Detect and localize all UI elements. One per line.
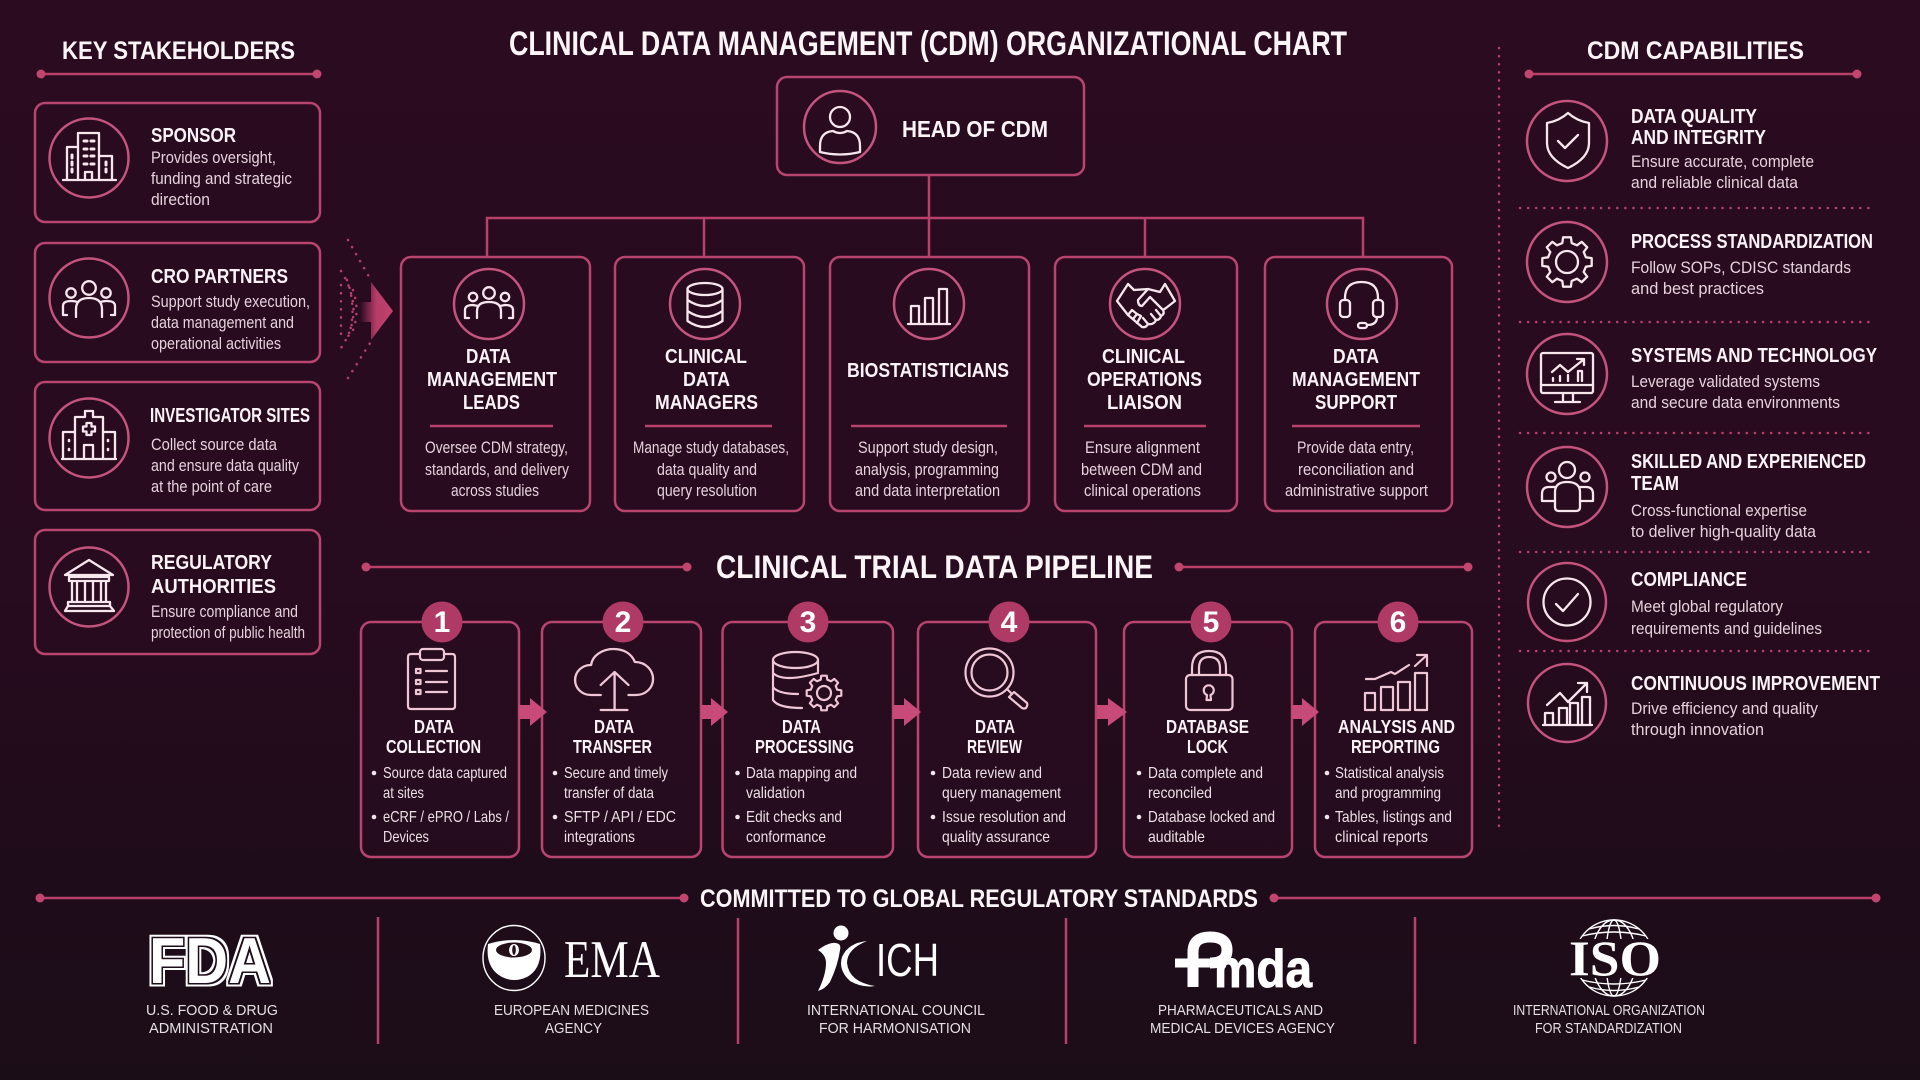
card: sponsor xyxy=(35,103,320,222)
card: regulatory authorities xyxy=(35,530,320,654)
logo: EMA: EUROPEAN MEDICINES xyxy=(494,1002,649,1019)
logo: ICH: ICH xyxy=(876,934,939,986)
capability: data quality xyxy=(1527,101,1814,192)
card: CRO partners: operational activities xyxy=(151,334,281,353)
capability: systems and technology: and secure data environments xyxy=(1631,393,1840,412)
panel: key stakeholders xyxy=(35,37,322,654)
icon: shield xyxy=(1547,113,1589,168)
logo: ICH: FOR HARMONISATION xyxy=(819,1020,971,1037)
card: sponsor: Provides oversight, xyxy=(151,148,276,167)
step 4: data review: query management xyxy=(942,785,1061,802)
step 2: data transfer: transfer of data xyxy=(564,785,654,802)
step 3: data processing: Edit checks and xyxy=(746,809,842,826)
step 1: data collection: DATA xyxy=(414,717,454,737)
heading: clinical trial data pipeline xyxy=(362,549,1472,585)
card: clinical operations liaison: CLINICAL xyxy=(1102,346,1185,368)
card: clinical operations liaison: clinical operations xyxy=(1084,481,1201,500)
step 6: analysis and reporting: clinical reports xyxy=(1335,829,1428,846)
card: biostatisticians: analysis, programming xyxy=(855,460,999,479)
card: clinical data managers: DATA xyxy=(683,369,730,391)
step 4: data review: 4 xyxy=(1001,606,1018,639)
step 5: database lock: 5 xyxy=(1203,606,1219,639)
logo: PMDA: PHARMACEUTICALS AND xyxy=(1158,1002,1323,1019)
logo: FDA: ADMINISTRATION xyxy=(149,1020,273,1037)
connector lines xyxy=(487,175,1363,257)
arrows between pipeline steps xyxy=(519,698,1319,726)
icon: office buildings xyxy=(63,133,116,180)
capability: data quality: AND INTEGRITY xyxy=(1631,127,1767,149)
icon: headset xyxy=(1340,282,1383,328)
step 4: data review: quality assurance xyxy=(942,829,1050,846)
card: regulatory authorities: REGULATORY xyxy=(151,552,273,574)
logo: EMA: EMA xyxy=(564,931,660,989)
icon: bar chart xyxy=(908,289,950,324)
step 3: data processing: 3 xyxy=(800,606,816,639)
logo: PMDA: mda xyxy=(1214,940,1312,999)
arrow: stakeholders to org chart xyxy=(341,240,393,378)
card: data management leads: standards, and delivery xyxy=(425,460,569,479)
card: data management leads: LEADS xyxy=(463,392,520,414)
card: data management support xyxy=(1265,257,1452,511)
step 3: data processing: conformance xyxy=(746,829,826,846)
step 5: database lock: reconciled xyxy=(1148,785,1212,802)
step 4: data review: REVIEW xyxy=(967,737,1022,757)
card: clinical data managers xyxy=(615,257,804,511)
step 6: analysis and reporting: Statistical analysis xyxy=(1335,765,1444,782)
card: clinical data managers: query resolution xyxy=(657,481,757,500)
capability: continuous improvement: Drive efficiency and quality xyxy=(1631,699,1818,718)
step 5: database lock xyxy=(1124,602,1292,857)
card: clinical data managers: MANAGERS xyxy=(655,392,758,414)
capability: skilled team: to deliver high-quality data xyxy=(1631,522,1816,541)
card: CRO partners: data management and xyxy=(151,313,294,332)
step 2: data transfer: SFTP / API / EDC xyxy=(564,809,676,826)
logo: ISO: FOR STANDARDIZATION xyxy=(1535,1020,1682,1037)
card: clinical data managers: data quality and xyxy=(657,460,757,479)
card: data management support: DATA xyxy=(1333,346,1379,368)
card: CRO partners: Support study execution, xyxy=(151,292,310,311)
capability: skilled team: TEAM xyxy=(1631,473,1679,495)
card: data management leads: MANAGEMENT xyxy=(427,369,557,391)
heading: global regulatory standards xyxy=(36,885,1880,913)
step 2: data transfer: 2 xyxy=(615,606,631,639)
card: data management leads: DATA xyxy=(466,346,511,368)
step 5: database lock: Data complete and xyxy=(1148,765,1263,782)
step 6: analysis and reporting: ANALYSIS AND xyxy=(1338,717,1455,737)
step 2: data transfer: Secure and timely xyxy=(564,765,668,782)
step 1: data collection: at sites xyxy=(383,785,424,802)
card: data management support: MANAGEMENT xyxy=(1292,369,1420,391)
capability: systems and technology: Leverage validated systems xyxy=(1631,372,1820,391)
step 6: analysis and reporting xyxy=(1315,602,1472,857)
capability: continuous improvement: through innovation xyxy=(1631,720,1764,739)
card: biostatisticians: BIOSTATISTICIANS xyxy=(847,360,1009,382)
step 6: analysis and reporting: Tables, listings and xyxy=(1335,809,1452,826)
capability: continuous improvement: CONTINUOUS IMPROVEMENT xyxy=(1631,673,1880,695)
step 1: data collection xyxy=(361,602,519,857)
card: data management support: administrative support xyxy=(1285,481,1428,500)
logo: ISO: ISO xyxy=(1569,930,1661,986)
heading: key stakeholders: KEY STAKEHOLDERS xyxy=(62,37,295,65)
capability: process standardization: Follow SOPs, CDISC standards xyxy=(1631,258,1851,277)
card: biostatisticians xyxy=(830,257,1029,511)
step 1: data collection: eCRF / ePRO / Labs / xyxy=(383,809,509,826)
card: biostatisticians: Support study design, xyxy=(858,438,998,457)
icon: monitor chart xyxy=(1541,353,1593,402)
card: CRO partners: CRO PARTNERS xyxy=(151,266,288,288)
icon: database with gear xyxy=(773,652,841,710)
step 3: data processing: validation xyxy=(746,785,805,802)
icon: team xyxy=(465,287,513,318)
heading: CDM capabilities: CDM CAPABILITIES xyxy=(1587,37,1804,65)
logo: EMA xyxy=(483,926,660,1037)
icon: people xyxy=(63,281,115,317)
card: data management support: reconciliation and xyxy=(1298,460,1414,479)
step 6: analysis and reporting: and programming xyxy=(1335,785,1441,802)
card: clinical operations liaison: Ensure alignment xyxy=(1085,438,1200,457)
logo: ICH xyxy=(807,926,985,1037)
head of CDM box xyxy=(777,77,1084,175)
card: investigator sites: Collect source data xyxy=(151,435,277,454)
icon: database xyxy=(688,283,722,327)
card: clinical data managers: Manage study databases, xyxy=(633,438,789,457)
step 4: data review: DATA xyxy=(975,717,1015,737)
icon: rising chart xyxy=(1543,683,1592,725)
head of CDM box: HEAD OF CDM xyxy=(902,116,1048,142)
step 2: data transfer: TRANSFER xyxy=(573,737,652,757)
card: investigator sites: INVESTIGATOR SITES xyxy=(150,405,310,427)
card: data management support: Provide data entry, xyxy=(1297,438,1414,457)
capability: process standardization: and best practices xyxy=(1631,279,1764,298)
step 2: data transfer: integrations xyxy=(564,829,635,846)
capability: systems and technology xyxy=(1527,334,1878,414)
capability: systems and technology: SYSTEMS AND TECHNOLOGY xyxy=(1631,345,1878,367)
step 6: analysis and reporting: 6 xyxy=(1390,606,1406,639)
capability: compliance xyxy=(1528,563,1822,641)
logo: ISO: INTERNATIONAL ORGANIZATION xyxy=(1513,1002,1705,1019)
logo: FDA xyxy=(146,924,278,1037)
logo: EMA: AGENCY xyxy=(545,1020,602,1037)
capability: compliance: COMPLIANCE xyxy=(1631,569,1747,591)
step 1: data collection: Source data captured xyxy=(383,765,507,782)
card: biostatisticians: and data interpretation xyxy=(855,481,1000,500)
card: data management leads: across studies xyxy=(451,481,539,500)
card: CRO partners xyxy=(35,243,320,362)
capability: skilled team: Cross-functional expertise xyxy=(1631,501,1807,520)
step 3: data processing: Data mapping and xyxy=(746,765,857,782)
capability: compliance: Meet global regulatory xyxy=(1631,597,1783,616)
card: sponsor: direction xyxy=(151,190,210,209)
icon: team xyxy=(1542,462,1593,511)
logo: PMDA: MEDICAL DEVICES AGENCY xyxy=(1150,1020,1335,1037)
step 6: analysis and reporting: REPORTING xyxy=(1351,737,1440,757)
capability: data quality: DATA QUALITY xyxy=(1631,106,1758,128)
step 4: data review xyxy=(918,602,1096,857)
icon: handshake xyxy=(1117,284,1175,327)
capability: process standardization xyxy=(1527,222,1873,302)
heading: global regulatory standards: COMMITTED TO GLOBAL REGULATORY STANDARDS xyxy=(700,885,1258,913)
card: sponsor: funding and strategic xyxy=(151,169,292,188)
logo: PMDA xyxy=(1150,937,1335,1037)
card: investigator sites: and ensure data quality xyxy=(151,456,299,475)
step 3: data processing: DATA xyxy=(782,717,821,737)
logo: ISO xyxy=(1513,920,1705,1037)
card: regulatory authorities: protection of public health xyxy=(151,623,305,642)
panel: CDM capabilities xyxy=(1499,37,1880,826)
step 5: database lock: LOCK xyxy=(1187,737,1228,757)
card: clinical data managers: CLINICAL xyxy=(665,346,747,368)
card: sponsor: SPONSOR xyxy=(151,125,236,147)
step 4: data review: Issue resolution and xyxy=(942,809,1066,826)
capability: compliance: requirements and guidelines xyxy=(1631,619,1822,638)
icon: clipboard xyxy=(408,649,455,709)
step 3: data processing: PROCESSING xyxy=(755,737,854,757)
card: data management leads xyxy=(401,257,590,511)
logo: FDA: FDA xyxy=(149,924,271,997)
step 1: data collection: 1 xyxy=(434,606,450,639)
capability: skilled team: SKILLED AND EXPERIENCED xyxy=(1631,451,1866,473)
step 4: data review: Data review and xyxy=(942,765,1042,782)
card: clinical operations liaison: OPERATIONS xyxy=(1087,369,1202,391)
card: clinical operations liaison: between CDM and xyxy=(1081,460,1202,479)
step 5: database lock: auditable xyxy=(1148,829,1205,846)
icon: gear xyxy=(1542,237,1592,287)
icon: person xyxy=(820,107,860,154)
step 3: data processing xyxy=(722,602,893,857)
capability: skilled team xyxy=(1527,447,1866,541)
main title: CLINICAL DATA MANAGEMENT (CDM) ORGANIZATIONAL CHART xyxy=(509,25,1347,63)
step 5: database lock: DATABASE xyxy=(1166,717,1249,737)
card: clinical operations liaison: LIAISON xyxy=(1107,392,1182,414)
logo: FDA: U.S. FOOD & DRUG xyxy=(146,1002,278,1019)
icon: hospital xyxy=(62,411,116,459)
capability: data quality: and reliable clinical data xyxy=(1631,173,1798,192)
card: investigator sites xyxy=(35,382,320,510)
icon: magnifier xyxy=(966,648,1027,708)
heading: clinical trial data pipeline: CLINICAL TRIAL DATA PIPELINE xyxy=(716,549,1153,585)
step 2: data transfer xyxy=(542,602,701,857)
icon: check circle xyxy=(1544,578,1590,626)
capability: continuous improvement xyxy=(1528,664,1880,742)
step 1: data collection: COLLECTION xyxy=(386,737,481,757)
capability: data quality: Ensure accurate, complete xyxy=(1631,152,1814,171)
step 2: data transfer: DATA xyxy=(594,717,634,737)
card: regulatory authorities: Ensure compliance and xyxy=(151,602,298,621)
icon: growth chart xyxy=(1365,655,1427,710)
card: data management leads: Oversee CDM strategy, xyxy=(425,438,568,457)
card: clinical operations liaison xyxy=(1055,257,1237,511)
icon: cloud upload xyxy=(575,649,653,710)
icon: padlock xyxy=(1186,651,1232,710)
logo: ICH: INTERNATIONAL COUNCIL xyxy=(807,1002,985,1019)
card: regulatory authorities: AUTHORITIES xyxy=(151,576,276,598)
icon: institution xyxy=(65,560,114,611)
card: data management support: SUPPORT xyxy=(1315,392,1397,414)
step 5: database lock: Database locked and xyxy=(1148,809,1275,826)
capability: process standardization: PROCESS STANDARDIZATION xyxy=(1631,231,1873,253)
step 1: data collection: Devices xyxy=(383,829,429,846)
card: investigator sites: at the point of care xyxy=(151,477,272,496)
